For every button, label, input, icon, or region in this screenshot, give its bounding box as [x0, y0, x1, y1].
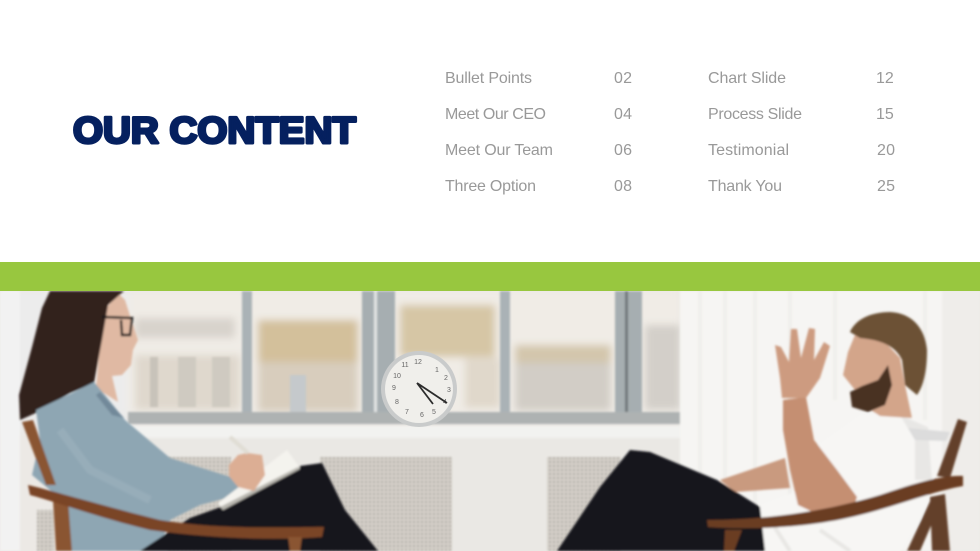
- table of contents: right column: [708, 70, 895, 195]
- trousers: [557, 450, 765, 551]
- icon: wall clock: 4: [443, 399, 447, 406]
- table of contents: right column: Thank You: [708, 178, 782, 195]
- table of contents: left column: 04: [614, 106, 632, 123]
- curtain: [680, 291, 942, 551]
- icon: wall clock: 6: [420, 412, 424, 419]
- table of contents: left column: 02: [614, 70, 632, 87]
- window frames, sill and radiators: [0, 291, 980, 551]
- table of contents: right column: Process Slide: [708, 106, 802, 123]
- icon: wall clock: 3: [447, 387, 451, 394]
- table of contents: right column: Testimonial: [708, 142, 789, 159]
- photo background: view through window: [134, 302, 680, 412]
- hair: [19, 291, 124, 420]
- face: [843, 335, 912, 418]
- icon: wall clock: 8: [395, 399, 399, 406]
- table of contents: right column: 12: [876, 70, 894, 87]
- shirt: [32, 382, 241, 551]
- face and neck: [96, 293, 138, 402]
- table of contents: right column: 15: [876, 106, 894, 123]
- icon: wall clock: 11: [401, 362, 409, 369]
- trousers: [140, 463, 378, 551]
- table of contents: left column: [445, 70, 632, 195]
- man: client gesturing: [557, 312, 967, 551]
- icon: wall clock: 1: [435, 367, 439, 374]
- table of contents: left column: 06: [614, 142, 632, 159]
- woman: therapist with notebook: [19, 291, 378, 551]
- chair: [907, 419, 967, 551]
- green band: [0, 262, 980, 291]
- glasses: [102, 317, 132, 335]
- hair: [850, 312, 927, 395]
- icon: wall clock: 9: [392, 385, 396, 392]
- notebook: [218, 450, 300, 510]
- beard: [850, 365, 892, 412]
- title: OUR CONTENT: [73, 110, 356, 151]
- chair: [22, 420, 72, 551]
- icon: wall clock: 12: [414, 359, 422, 366]
- table of contents: right column: Chart Slide: [708, 70, 786, 87]
- resting arm: [720, 458, 790, 492]
- table of contents: right column: 20: [877, 142, 895, 159]
- icon: wall clock: 10: [393, 373, 401, 380]
- table of contents: left column: Three Option: [445, 178, 536, 195]
- table of contents: right column: 25: [877, 178, 895, 195]
- photo: therapist and client in an office: [0, 291, 980, 551]
- table of contents: left column: Meet Our Team: [445, 142, 553, 159]
- icon: wall clock: 5: [432, 409, 436, 416]
- icon: wall clock: 2: [444, 375, 448, 382]
- shirt: [760, 412, 933, 551]
- icon: wall clock: 7: [405, 409, 409, 416]
- icon: wall clock: [381, 351, 457, 427]
- hand and pen: [229, 453, 265, 491]
- table of contents: left column: Meet Our CEO: [445, 106, 546, 123]
- table of contents: left column: Bullet Points: [445, 70, 532, 87]
- table of contents: left column: 08: [614, 178, 632, 195]
- arm and raised hand: [783, 397, 857, 513]
